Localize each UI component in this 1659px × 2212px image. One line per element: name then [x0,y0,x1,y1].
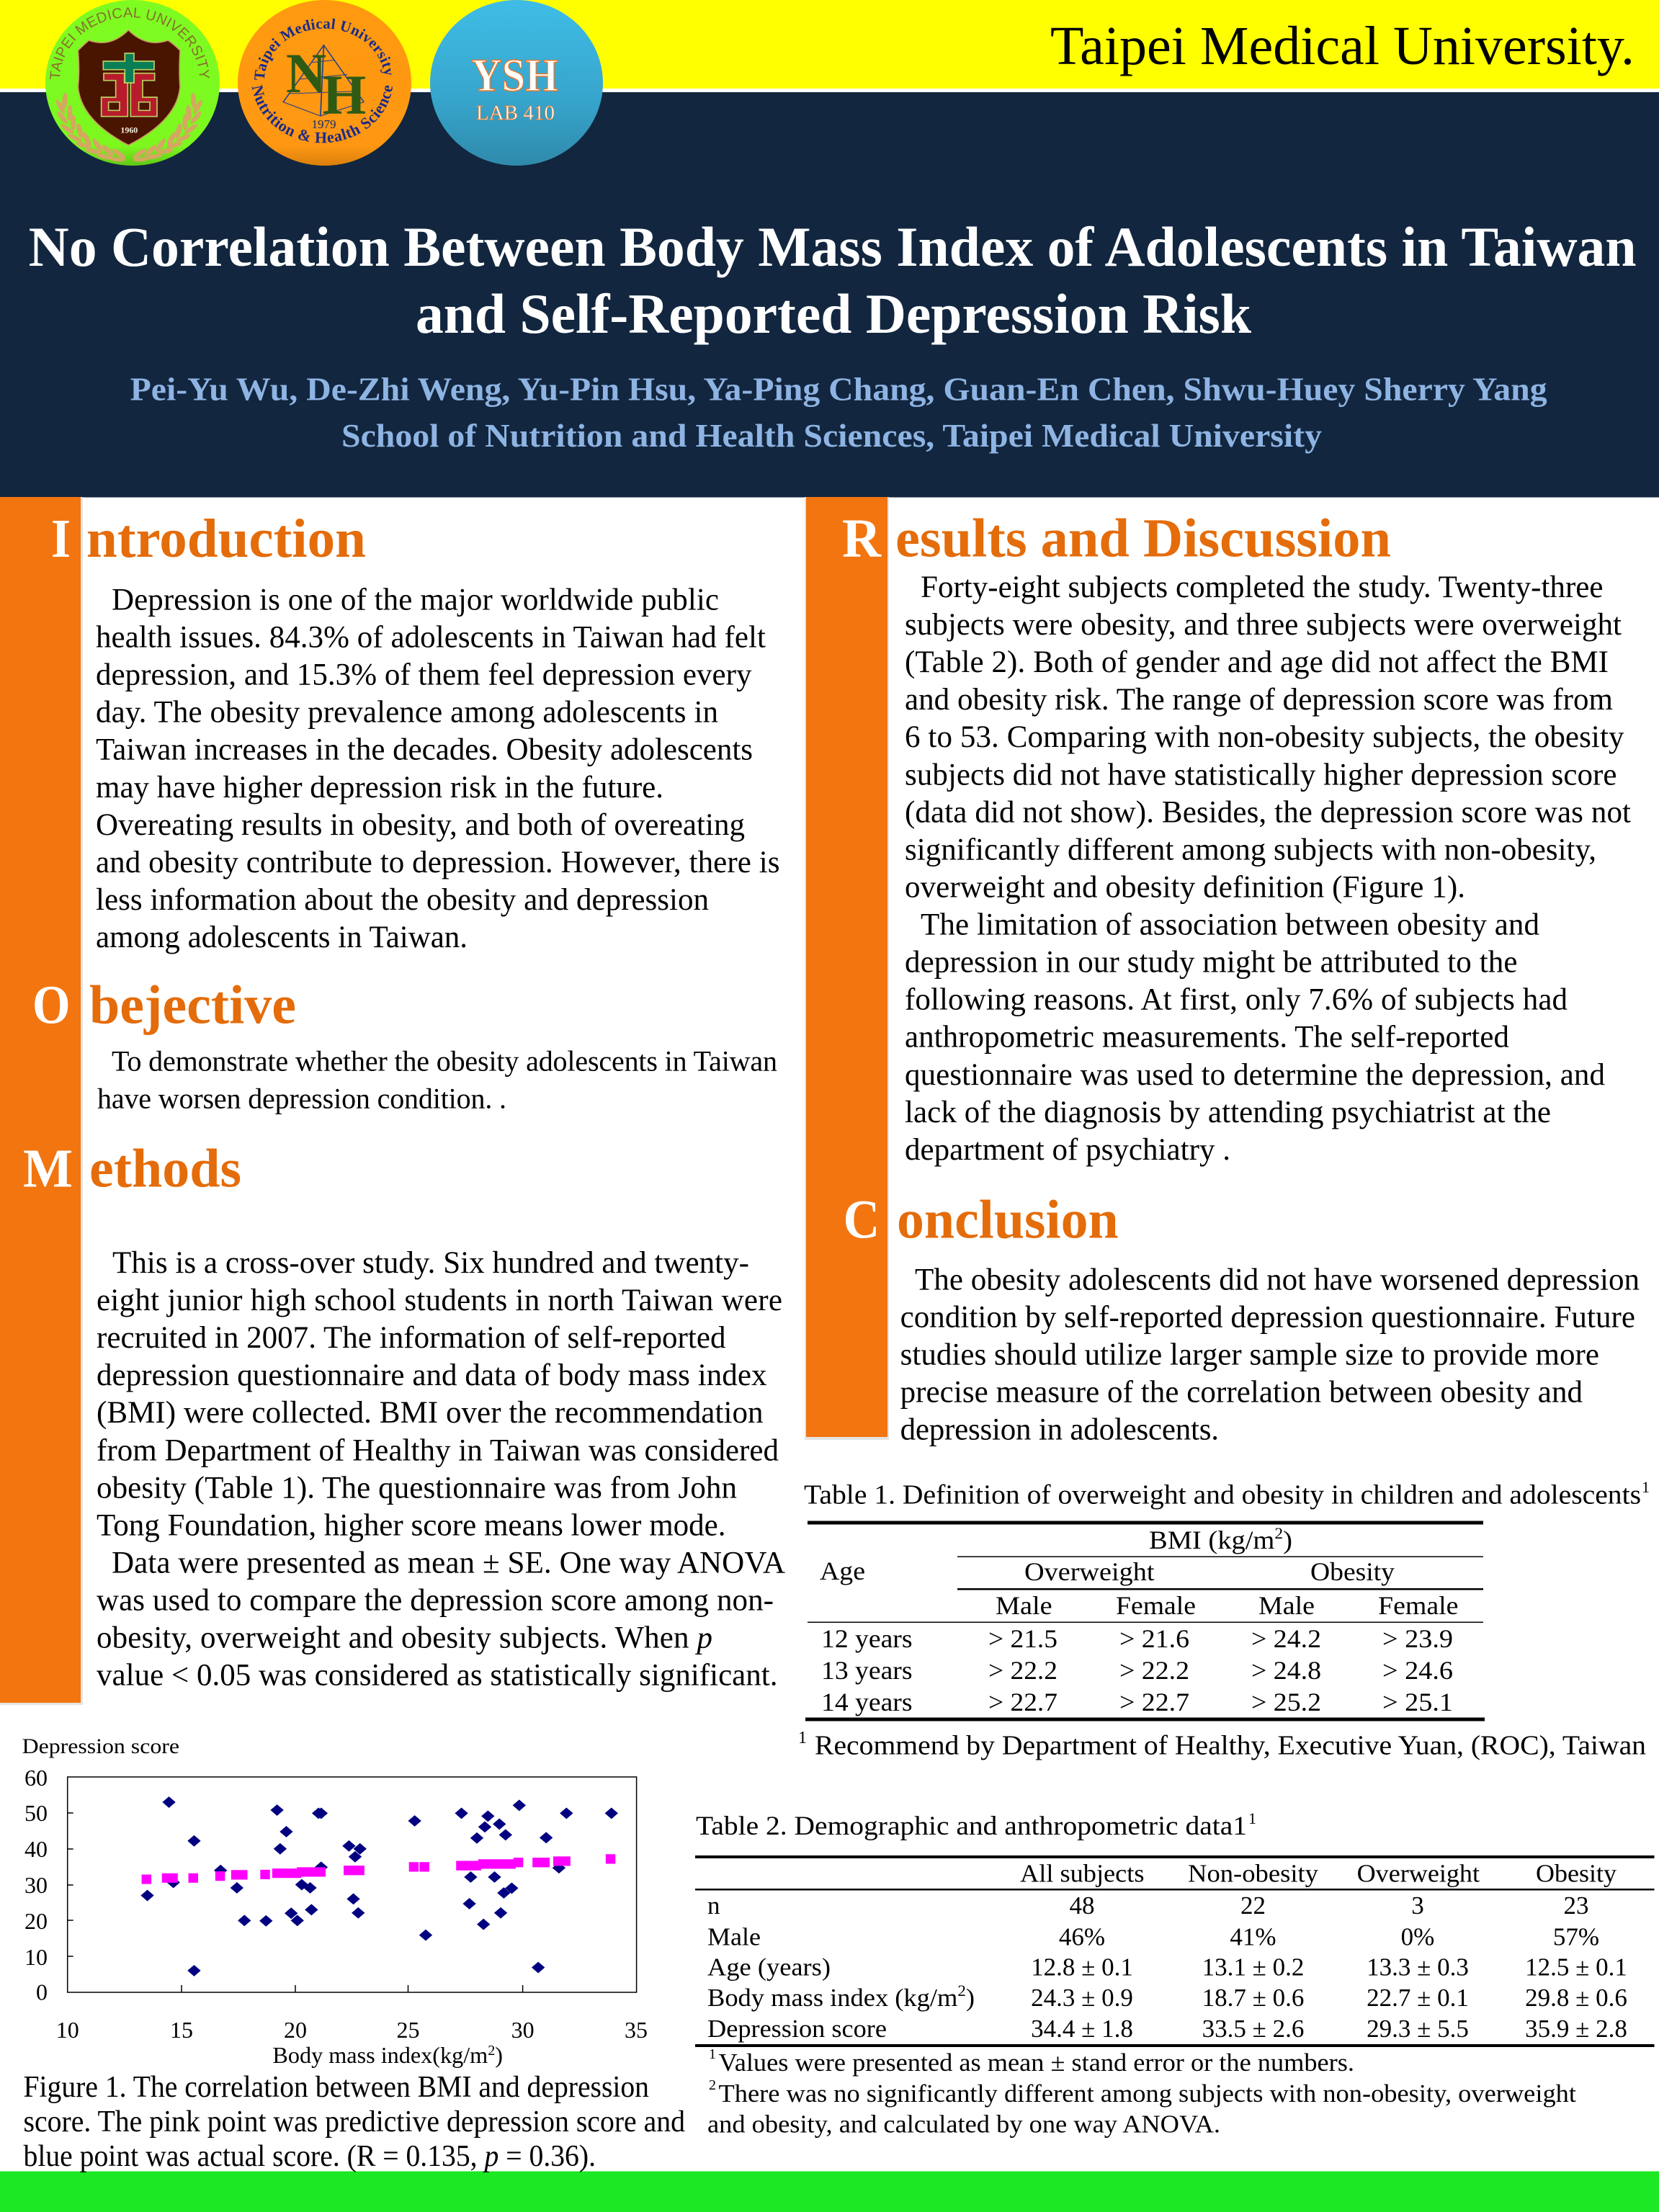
heading: Introduction: I [51,509,71,569]
text: methods body: obesity (Table 1). The questionnaire was from John [97,1471,737,1505]
table 2 rows: Body mass index (kg/m [707,1984,947,2012]
scatter chart: BMI vs depression score [22,1734,648,2068]
authors and affiliation: School of Nutrition and Health Sciences, Taipei Medical University [341,417,1322,454]
table 2 rows: 46% [1059,1923,1105,1951]
text: methods body: obesity, overweight and obesity subjects. When p [97,1621,712,1655]
table 1 rows: > 22.2 [988,1656,1057,1685]
university name: Taipei Medical University. [1050,16,1635,76]
chart x axis title: Body mass index(kg/m [272,2042,486,2068]
table 2 rows: Age (years) [707,1953,831,1982]
table 2 header: All subjects [1020,1860,1144,1888]
predicted score points (pink squares) [142,1854,615,1884]
figure 1 caption: score. The pink point was predictive depression score and [23,2105,685,2139]
table 1 rows: > 22.7 [988,1688,1057,1716]
chart y axis labels: 0 [36,1979,48,2005]
text: introduction body: day. The obesity prevalence among adolescents in [96,696,718,730]
text: results body: department of psychiatry . [905,1133,1230,1167]
table 2 rows: 34.4 ± 1.8 [1031,2015,1133,2043]
text: introduction body: Taiwan increases in the decades. Obesity adolescents [96,733,753,767]
table 2 footnotes: There was no significantly different among subjects with non-obesity, overweight [719,2079,1576,2108]
chart x axis title: 2 [488,2043,495,2059]
text: methods body: from Department of Healthy in Taiwan was considered [97,1433,779,1467]
table 1 header: Age [820,1557,865,1585]
table 1 rows: > 21.6 [1119,1624,1189,1653]
text: introduction body: depression, and 15.3% of them feel depression every [96,658,752,692]
chart x axis labels: 10 [56,2017,79,2043]
table 2 rows: 3 [1411,1891,1424,1920]
table 2 rows: 0% [1401,1923,1434,1951]
title: and Self-Reported Depression Risk [416,282,1252,345]
text: objective body: To demonstrate whether the obesity adolescents in Taiwan [112,1044,777,1078]
figure 1 caption [23,2071,685,2173]
heading: Conclusion: C [844,1190,880,1250]
table 1 header: ) [1283,1526,1292,1554]
text: methods body: value < 0.05 was considered as statistically significant. [97,1659,778,1693]
text: results body: (data did not show). Besides, the depression score was not [905,795,1631,829]
table 2 rows: 13.1 ± 0.2 [1202,1953,1304,1982]
text: conclusion body: precise measure of the correlation between obesity and [900,1376,1583,1409]
table 2 rows: Depression score [707,2015,887,2043]
text: results body: following reasons. At first, only 7.6% of subjects had [905,983,1568,1017]
text: methods body: eight junior high school students in north Taiwan were [97,1284,782,1317]
table 1 rows: 14 years [821,1688,912,1716]
text: objective body [97,1044,777,1115]
table 2 rows: Male [707,1923,761,1951]
left orange side bar [0,497,83,1705]
table 1 header [820,1524,1458,1620]
chart y axis labels: 20 [24,1908,48,1934]
table 1 rows: > 22.2 [1119,1656,1189,1685]
table 2 rows: 18.7 ± 0.6 [1202,1984,1304,2012]
table 2 footnotes: 1 [709,2046,716,2062]
logo: Nutrition and Health Sciences: Taipei Medical University [254,19,392,80]
bottom green bar [0,2171,1659,2212]
heading: Methods: M [23,1138,73,1199]
text: results body: and obesity risk. The range of depression score was from [905,683,1613,717]
chart x axis labels: 35 [625,2017,648,2043]
heading: Introduction: ntroduction [86,509,366,569]
table 2 rows: 24.3 ± 0.9 [1031,1984,1133,2012]
figure 1 caption: blue point was actual score. (R = 0.135, p = 0.36). [23,2140,596,2173]
table 2 header [1020,1860,1617,1888]
table 2 header: Non-obesity [1188,1860,1319,1888]
table 2 rows [707,1891,1627,2043]
text: methods body: Tong Foundation, higher score means lower mode. [97,1508,726,1542]
table 2 rows: 12.5 ± 0.1 [1525,1953,1627,1982]
text: introduction body: Depression is one of the major worldwide public [112,583,719,617]
text: results body: The limitation of association between obesity and [921,908,1539,942]
text: conclusion body: The obesity adolescents did not have worsened depression [915,1263,1640,1297]
table 2 rows: 22.7 ± 0.1 [1367,1984,1469,2012]
text: introduction body: and obesity contribute to depression. However, there is [96,846,779,879]
logo: Nutrition and Health Sciences: N [286,42,326,104]
table 1: definition of overweight and obesity [798,1478,1650,1760]
chart y axis labels: 50 [24,1800,48,1826]
table 1 header: Female [1116,1591,1196,1620]
table 1 rows: > 21.5 [988,1624,1057,1653]
text: introduction body: among adolescents in Taiwan. [96,921,468,954]
text: results body: subjects did not have statistically higher depression score [905,758,1616,792]
text: methods body: depression questionnaire and data of body mass index [97,1358,766,1392]
chart y axis labels: 10 [24,1944,48,1970]
text: conclusion body [900,1263,1640,1446]
navy title band [0,92,1659,497]
chart x axis labels: 15 [170,2017,193,2043]
text: introduction body: health issues. 84.3% of adolescents in Taiwan had felt [96,621,766,654]
logo: YSH Lab 410: YSH [471,50,558,102]
logo: Nutrition and Health Sciences: 1979 [311,117,336,131]
text: methods body: (BMI) were collected. BMI over the recommendation [97,1396,764,1430]
table 2 rows: 22 [1240,1891,1266,1920]
table 2 footnotes: and obesity, and calculated by one way ANOVA. [707,2110,1220,2139]
table 1 header: Male [1258,1591,1315,1620]
chart x axis labels: 25 [396,2017,419,2043]
text: results body: subjects were obesity, and three subjects were overweight [905,608,1622,642]
heading: Objective: bejective [89,975,296,1036]
text: conclusion body: depression in adolescents. [900,1413,1219,1446]
right orange side bar [805,497,889,1440]
text: introduction body: may have higher depression risk in the future. [96,771,663,805]
text: results body: overweight and obesity definition (Figure 1). [905,870,1465,905]
text: results body: anthropometric measurements. The self-reported [905,1021,1509,1054]
table 1 rows: > 24.6 [1382,1656,1453,1685]
table 1 rows [821,1624,1453,1716]
logo: Nutrition and Health Sciences [238,0,411,166]
figure 1 caption: Figure 1. The correlation between BMI and depression [23,2071,649,2104]
text: introduction body: less information about the obesity and depression [96,883,709,917]
text: conclusion body: studies should utilize larger sample size to provide more [900,1338,1599,1371]
chart y axis labels [24,1765,48,2005]
chart x axis title: ) [495,2042,503,2068]
text: results body [905,570,1631,1167]
table 2 rows: 29.3 ± 5.5 [1367,2015,1469,2043]
text: results body: (Table 2). Both of gender and age did not affect the BMI [905,645,1609,679]
table 2 rows: 33.5 ± 2.6 [1202,2015,1304,2043]
heading: Objective: O [32,975,71,1036]
table 2 rows: 41% [1230,1923,1276,1951]
chart y axis labels: 60 [24,1765,48,1791]
table 1 rules [805,1521,1485,1721]
table 1 caption: 1 [1642,1478,1650,1496]
logo: Taipei Medical University: TAIPEI MEDICAL UNIVERSITY [50,7,210,79]
text: results body: questionnaire was used to determine the depression, and [905,1058,1605,1092]
table 1 rows: > 25.1 [1382,1688,1453,1716]
table 2 rows: 12.8 ± 0.1 [1031,1953,1133,1982]
table 2 caption: 1 [1248,1809,1256,1827]
chart y axis title: Depression score [22,1734,179,1758]
text: results body: lack of the diagnosis by attending psychiatrist at the [905,1096,1551,1129]
table 2 footnotes: 2 [709,2077,716,2093]
table 1 rows: > 22.7 [1119,1688,1189,1716]
top yellow banner [0,0,1659,89]
table 2 rows: ) [966,1984,975,2012]
text: methods body: This is a cross-over study. Six hundred and twenty- [112,1246,749,1280]
logo: YSH Lab 410: LAB 410 [476,102,555,125]
text: methods body: was used to compare the depression score among non- [97,1583,774,1618]
table 1 footnote: Recommend by Department of Healthy, Executive Yuan, (ROC), Taiwan [815,1730,1646,1760]
table 1 rows: 12 years [821,1624,912,1653]
heading: Methods [23,1138,241,1199]
text: results body: 6 to 53. Comparing with non-obesity subjects, the obesity [905,720,1624,754]
chart x axis labels: 30 [511,2017,535,2043]
table 2 rows: 2 [957,1982,966,2000]
chart plot frame and ticks [68,1777,637,1992]
logo: Taipei Medical University [45,0,220,166]
table 1 footnote: 1 [798,1729,807,1747]
logo: Taipei Medical University: 1960 [120,125,138,135]
table 2: demographic and anthropometric data [695,1809,1654,2139]
logo: Nutrition and Health Sciences: H [323,63,366,126]
text: introduction body: Overeating results in obesity, and both of overeating [96,808,745,842]
text: results body: depression in our study might be attributed to the [905,946,1517,980]
table 2 header: Overweight [1357,1860,1480,1888]
table 1 caption: Table 1. Definition of overweight and obesity in children and adolescents [804,1480,1641,1510]
text: objective body: have worsen depression condition. . [97,1082,506,1115]
title [29,215,1637,345]
table 2 caption: Table 2. Demographic and anthropometric data1 [696,1812,1247,1841]
table 2 rows: 48 [1069,1891,1095,1920]
chart x axis labels [56,2017,648,2043]
table 2 rows: 29.8 ± 0.6 [1525,1984,1627,2012]
actual score points (blue diamonds) [140,1796,618,1976]
table 1 header: Male [996,1591,1052,1620]
table 1 header: 2 [1274,1524,1283,1542]
chart y axis labels: 30 [24,1872,48,1898]
logo: YSH Lab 410 [430,0,603,166]
authors and affiliation: Pei-Yu Wu, De-Zhi Weng, Yu-Pin Hsu, Ya-Ping Chang, Guan-En Chen, Shwu-Huey Sherry Yang [130,371,1547,408]
table 2 footnotes [707,2046,1576,2139]
table 2 rows: 35.9 ± 2.8 [1525,2015,1627,2043]
table 2 footnotes: Values were presented as mean ± stand error or the numbers. [719,2048,1354,2077]
table 2 header: Obesity [1536,1860,1617,1888]
text: methods body [97,1246,785,1693]
table 1 header: Female [1378,1591,1458,1620]
heading: Results and Discussion: R [842,509,882,569]
text: results body: Forty-eight subjects completed the study. Twenty-three [921,570,1604,604]
table 2 rows: 13.3 ± 0.3 [1367,1953,1469,1982]
text: introduction body [96,583,779,954]
table 1 rows: > 25.2 [1251,1688,1321,1716]
table 2 rows: 23 [1563,1891,1589,1920]
table 1 rows: 13 years [821,1656,912,1685]
table 2 rows: 57% [1553,1923,1599,1951]
chart x axis labels: 20 [284,2017,307,2043]
table 1 header: Obesity [1310,1557,1395,1586]
text: results body: significantly different among subjects with non-obesity, [905,833,1596,867]
table 1 rows: > 23.9 [1382,1624,1453,1653]
text: methods body: recruited in 2007. The information of self-reported [97,1321,726,1355]
table 1 rows: > 24.8 [1251,1656,1321,1685]
table 1 header: Overweight [1024,1557,1154,1586]
heading: Conclusion: onclusion [897,1190,1119,1250]
heading: Methods: ethods [89,1138,241,1199]
table 2 rules [695,1855,1654,2047]
chart y axis labels: 40 [24,1836,48,1862]
title: No Correlation Between Body Mass Index of Adolescents in Taiwan [29,215,1637,278]
table 1 header: BMI (kg/m [1149,1526,1266,1554]
text: conclusion body: condition by self-reported depression questionnaire. Future [900,1301,1635,1334]
text: methods body: Data were presented as mean ± SE. One way ANOVA [112,1546,785,1580]
authors and affiliation [130,371,1547,454]
table 2 rows: n [707,1891,720,1920]
table 1 rows: > 24.2 [1251,1624,1321,1653]
heading: Results and Discussion: esults and Discussion [895,509,1391,569]
